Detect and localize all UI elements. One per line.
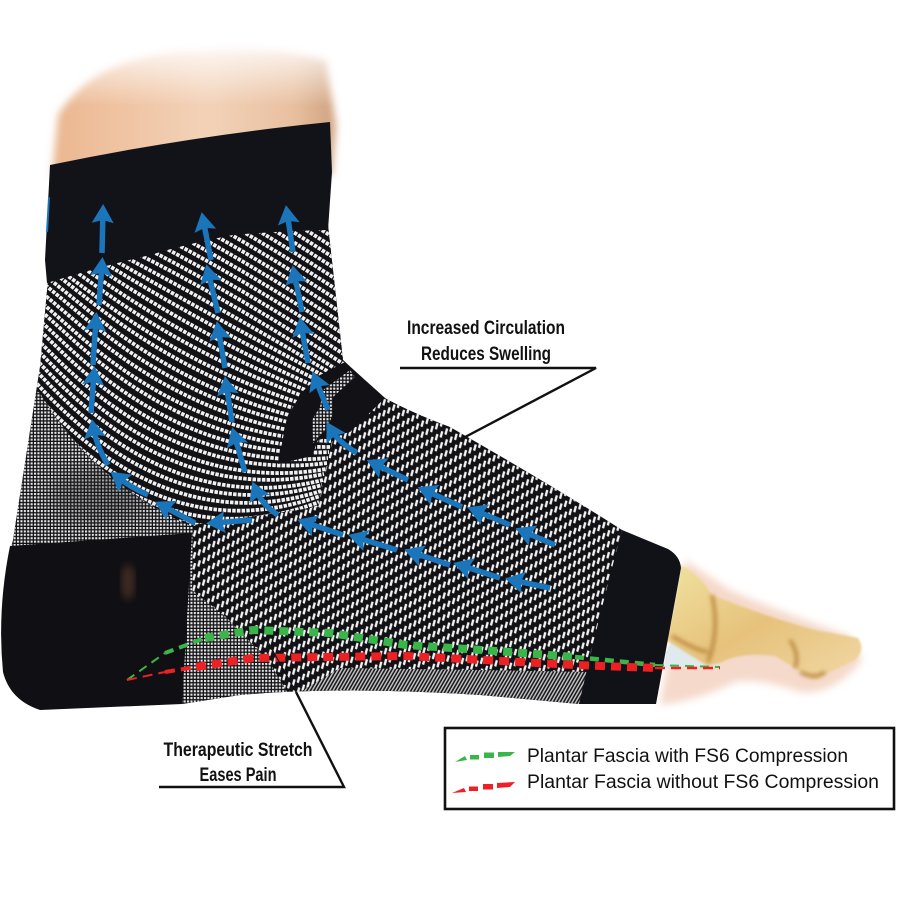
forefoot: skin shadow and toe bones	[660, 560, 862, 705]
leg skin above sleeve	[40, 36, 350, 175]
callout: increased circulation: Reduces Swelling	[421, 344, 551, 365]
callout: increased circulation	[400, 318, 596, 445]
legend key: red dashes	[452, 782, 515, 793]
fine weave around heel and sole	[12, 390, 287, 704]
legend text: with compression: Plantar Fascia with FS6 Compression	[527, 746, 848, 767]
callout: therapeutic stretch: Eases Pain	[200, 765, 276, 786]
sleeve foot and ankle knit	[12, 225, 622, 704]
black heel pad	[1, 533, 192, 710]
fine knit under the arch	[300, 668, 590, 705]
arrow path: front of ankle	[287, 212, 555, 545]
red dashed line: plantar fascia without compression	[127, 656, 720, 680]
callout: increased circulation: Increased Circulation	[407, 318, 565, 339]
callout: therapeutic stretch	[159, 642, 344, 787]
arrow path: middle of ankle	[203, 219, 550, 588]
blue circulation arrows	[91, 211, 555, 588]
legend key: green dashes	[455, 752, 515, 762]
legend text: without compression: Plantar Fascia without FS6 Compression	[527, 772, 879, 793]
curved ankle compression stripes	[36, 226, 346, 525]
callout: therapeutic stretch: Therapeutic Stretch	[164, 740, 312, 761]
legend box	[445, 728, 894, 809]
ankle tongue patch	[278, 362, 385, 464]
green dashed line: plantar fascia with compression	[127, 630, 720, 680]
black ankle cuff	[45, 122, 332, 283]
arrow path: rear of ankle	[91, 211, 252, 523]
black toe band	[579, 530, 681, 704]
